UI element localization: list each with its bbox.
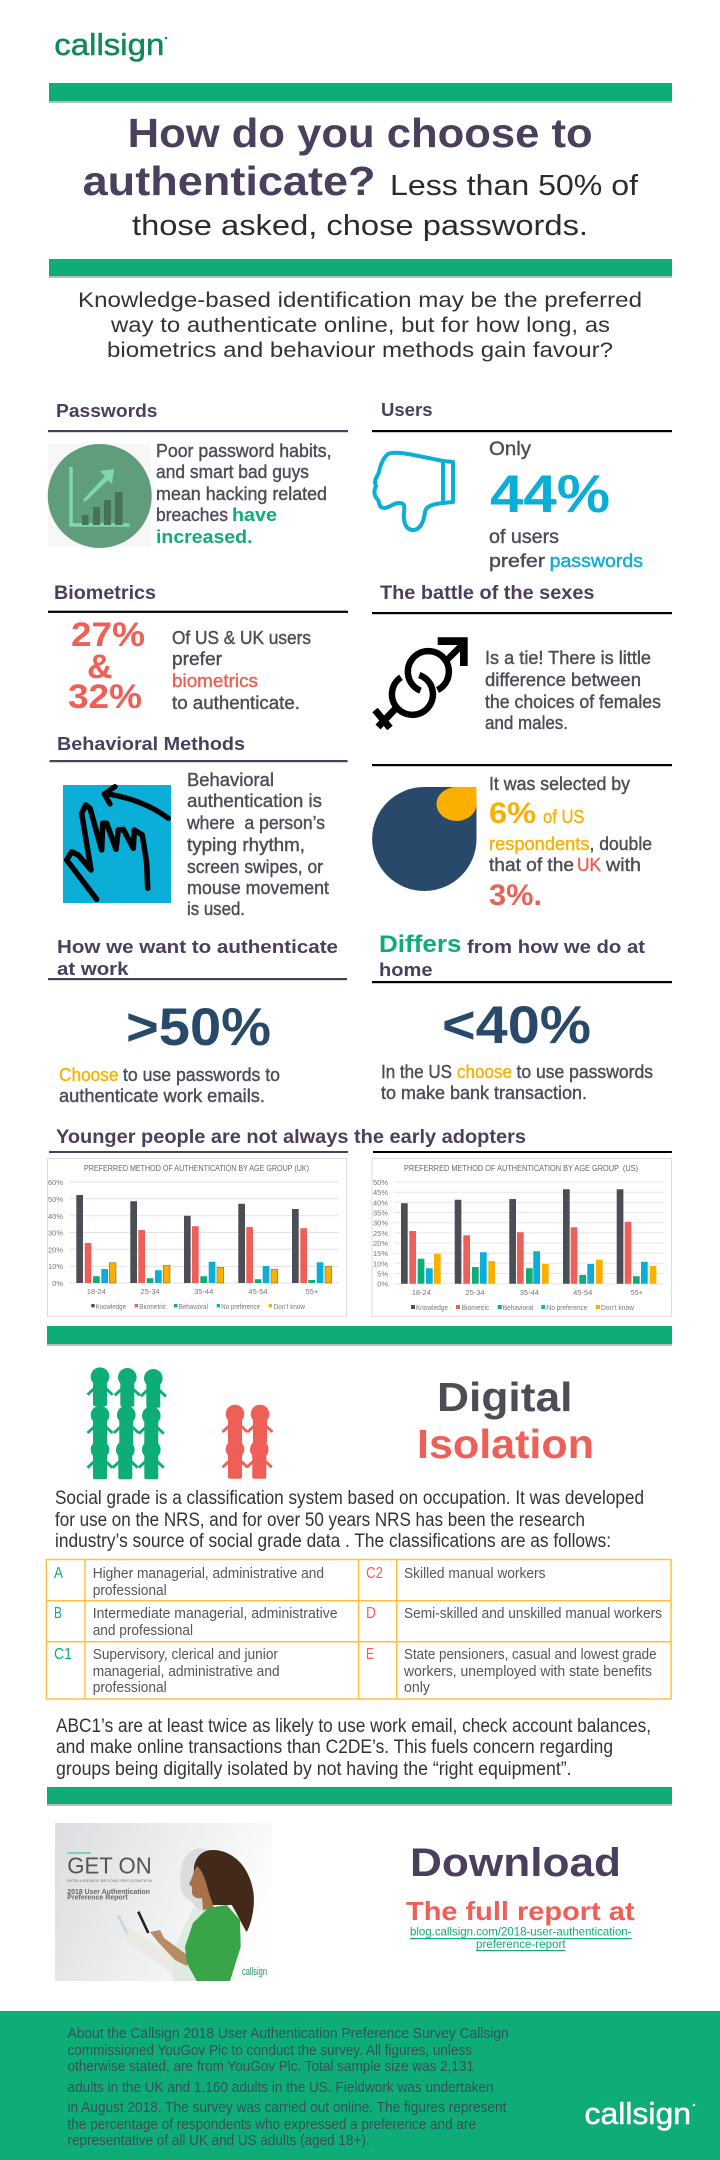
table: social grades: Higher managerial, administrative and bbox=[93, 1566, 324, 1582]
pie chart bbox=[372, 787, 476, 891]
link: report url: blog.callsign.com/2018-user-authentication- bbox=[410, 1925, 632, 1939]
chart legend bbox=[411, 1303, 635, 1312]
text block: password habits: increased. bbox=[156, 527, 252, 547]
bar chart: UK bbox=[48, 1158, 346, 1316]
chart legend: Don’t know bbox=[601, 1303, 635, 1312]
report cover image: Preference Report bbox=[67, 1894, 128, 1901]
bar chart: US: 55+ bbox=[630, 1288, 644, 1297]
table: social grades: professional bbox=[93, 1583, 167, 1599]
footer panel bbox=[0, 2011, 720, 2160]
bar chart: US: 18-24 bbox=[412, 1288, 431, 1297]
table: social grades: C2 bbox=[366, 1565, 383, 1582]
bar chart: US: 35% bbox=[373, 1208, 388, 1218]
text block: about the survey: adults in the UK and 1,160 adults in the US. Fieldwork was undertaken bbox=[68, 2079, 494, 2096]
panel: behavioral methods bbox=[50, 734, 348, 919]
text block: social grade: Social grade is a classification system based on occupation. It was developed bbox=[55, 1488, 644, 1509]
table: social grades: E bbox=[366, 1646, 374, 1663]
text block: selected by: respondents bbox=[489, 834, 590, 854]
panel: work authentication bbox=[48, 937, 347, 1106]
text block: selected by: with bbox=[605, 855, 641, 875]
heading: battle of the sexes: The battle of the sexes bbox=[380, 583, 594, 604]
table: social grades: Supervisory, clerical and junior bbox=[93, 1647, 278, 1663]
report cover image: GET ON bbox=[67, 1852, 152, 1878]
text block: password habits: have bbox=[232, 505, 277, 525]
icon: green people group bbox=[88, 1367, 166, 1479]
bar chart: US: 50% bbox=[373, 1178, 388, 1187]
heading: at work: at work bbox=[57, 959, 130, 979]
text block: bank transaction: choose bbox=[457, 1062, 512, 1082]
text block: about the survey: in August 2018. The survey was carried out online. The figures represent bbox=[68, 2099, 507, 2116]
text block: about the survey: otherwise stated, are from YouGov Plc. Total sample size was 2,131 bbox=[68, 2058, 474, 2075]
bar chart: US: PREFERRED METHOD OF AUTHENTICATION BY AGE GROUP (US) bbox=[404, 1164, 638, 1173]
text block: about the survey: representative of all UK and US adults (aged 18+). bbox=[68, 2132, 370, 2149]
panel: biometrics bbox=[48, 583, 348, 716]
text block: selected by: 3%. bbox=[489, 879, 542, 912]
table: social grades: and professional bbox=[93, 1623, 193, 1639]
title bbox=[83, 110, 639, 242]
panel: users bbox=[372, 400, 672, 571]
chart legend: Biometric bbox=[462, 1303, 490, 1312]
text block: behavioral authentication: is used. bbox=[187, 899, 245, 919]
icon: red people group bbox=[222, 1405, 272, 1479]
table: social grades: only bbox=[404, 1680, 431, 1696]
icon: thumbs down bbox=[374, 453, 453, 530]
text block: biometrics: prefer bbox=[172, 649, 222, 669]
text block: selected by bbox=[489, 774, 652, 912]
table: social grades bbox=[46, 1560, 671, 1699]
text block: work emails bbox=[59, 1065, 280, 1106]
table: social grades: A bbox=[54, 1565, 64, 1582]
bar chart: UK: 30% bbox=[48, 1228, 63, 1238]
bar chart: US: 5% bbox=[377, 1270, 388, 1278]
text block: biometrics: biometrics bbox=[172, 671, 258, 691]
bar chart: US: 0% bbox=[377, 1280, 388, 1289]
chart legend: Knowledge bbox=[96, 1302, 126, 1311]
report cover image: INTELLIGENCE BEYOND RECOGNITION bbox=[67, 1879, 152, 1883]
text block: work emails: Choose bbox=[59, 1065, 118, 1085]
text block: work emails: to use passwords to bbox=[123, 1065, 280, 1085]
icon: rising chart in circle bbox=[48, 444, 152, 548]
table: social grades: Skilled manual workers bbox=[404, 1566, 546, 1582]
heading: digital isolation: Isolation bbox=[417, 1421, 594, 1467]
section bar: digital isolation top bbox=[47, 1326, 672, 1346]
text block: selected by: that of the bbox=[489, 855, 574, 875]
text block: 44 percent: passwords bbox=[550, 551, 643, 571]
text block: selected by: of US bbox=[543, 807, 584, 827]
heading: at work bbox=[57, 937, 338, 979]
text block: about the survey: commissioned YouGov Plc to conduct the survey. All figures, unless bbox=[68, 2042, 472, 2059]
table: social grades: B bbox=[54, 1605, 62, 1622]
stats: 27 and 32 percent: 27% bbox=[71, 616, 145, 654]
heading: the full report at: The full report at bbox=[406, 1896, 635, 1926]
text block: about the survey bbox=[68, 2025, 509, 2149]
text block: biometrics bbox=[172, 628, 311, 713]
bar chart: UK: 40% bbox=[48, 1212, 63, 1221]
text block: 44 percent: prefer bbox=[489, 551, 545, 571]
panel: home authentication bbox=[372, 931, 672, 1103]
text block: selected by: It was selected by bbox=[489, 774, 630, 794]
bar chart: US: 45% bbox=[373, 1188, 388, 1197]
bar chart: US: 30% bbox=[373, 1219, 388, 1228]
text block: behavioral authentication: Behavioral bbox=[187, 770, 274, 790]
text block: behavioral authentication: authentication is bbox=[187, 791, 322, 811]
text block: behavioral authentication bbox=[186, 770, 329, 919]
chart legend: No preference bbox=[221, 1302, 260, 1311]
link: report url: preference-report bbox=[476, 1937, 566, 1951]
panel: passwords bbox=[48, 401, 348, 548]
table: social grades: D bbox=[366, 1605, 376, 1622]
link: report url bbox=[410, 1925, 632, 1951]
icon: swiping hand bbox=[63, 785, 171, 903]
text block: biometrics: to authenticate. bbox=[172, 693, 300, 713]
intro text: way to authenticate online, but for how long, as bbox=[110, 314, 610, 337]
chart legend: Don’t know bbox=[274, 1302, 305, 1311]
bar chart: UK: 18-24 bbox=[87, 1287, 106, 1296]
bar chart: US: 45-54 bbox=[573, 1288, 592, 1297]
text block: ABC1: and make online transactions than C2DE’s. This fuels concern regarding bbox=[56, 1737, 613, 1758]
text block: password habits: and smart bad guys bbox=[156, 462, 309, 482]
title: authenticate? bbox=[83, 158, 376, 204]
bar chart: UK: 55+ bbox=[306, 1287, 319, 1296]
report cover image bbox=[55, 1823, 272, 1981]
bar chart: US: 15% bbox=[373, 1249, 388, 1258]
heading: differs at home: from how we do at bbox=[467, 937, 645, 957]
bar chart: UK: PREFERRED METHOD OF AUTHENTICATION BY AGE GROUP (UK) bbox=[84, 1164, 309, 1173]
text block: password habits: breaches bbox=[156, 505, 228, 525]
text block: behavioral authentication: screen swipes, or bbox=[187, 857, 323, 877]
section bar: download top bbox=[47, 1787, 672, 1806]
heading: differs at home: home bbox=[379, 960, 432, 980]
chart legend: Behavioral bbox=[503, 1303, 534, 1312]
text block: about the survey: the percentage of respondents who expressed a preference and are bbox=[68, 2116, 476, 2133]
title: How do you choose to bbox=[128, 110, 593, 156]
stat: under 40 percent: <40% bbox=[442, 996, 591, 1055]
text block: ABC1: ABC1’s are at least twice as likely to use work email, check account balances, bbox=[56, 1716, 651, 1737]
bar chart: US: 20% bbox=[373, 1239, 388, 1248]
stats: 27 and 32 percent: 32% bbox=[68, 678, 142, 716]
table: social grades: C1 bbox=[54, 1646, 72, 1663]
text block: 44 percent: Only bbox=[489, 439, 532, 460]
heading: download: Download bbox=[410, 1841, 621, 1885]
table: social grades: professional bbox=[93, 1680, 167, 1696]
text block: password habits: mean hacking related bbox=[156, 484, 327, 504]
bar chart: US: 40% bbox=[373, 1198, 388, 1207]
stat: over 50 percent: >50% bbox=[126, 998, 271, 1057]
bar chart: UK: 10% bbox=[48, 1262, 63, 1271]
chart legend: Behavioral bbox=[179, 1302, 208, 1311]
text block: behavioral authentication: where a person’s bbox=[186, 813, 325, 833]
chart legend: Knowledge bbox=[416, 1303, 448, 1312]
bar chart: US: 25% bbox=[373, 1229, 388, 1238]
bar chart: US: 10% bbox=[373, 1259, 388, 1268]
heading: at work: How we want to authenticate bbox=[57, 937, 338, 957]
text block: bank transaction: to make bank transaction. bbox=[381, 1083, 587, 1103]
chart legend: Biometric bbox=[139, 1302, 166, 1311]
text block: ABC1 bbox=[56, 1716, 651, 1780]
table: social grades: State pensioners, casual and lowest grade bbox=[404, 1647, 657, 1663]
text block: a tie: the choices of females bbox=[485, 692, 661, 712]
text block: password habits: Poor password habits, bbox=[156, 441, 332, 461]
stats: 27 and 32 percent: & bbox=[87, 648, 112, 686]
heading: digital isolation: Digital bbox=[437, 1374, 572, 1420]
logo: callsign white: callsign bbox=[584, 2096, 691, 2131]
text block: ABC1: groups being digitally isolated by not having the “right equipment”. bbox=[56, 1759, 572, 1780]
text block: behavioral authentication: typing rhythm, bbox=[187, 835, 305, 855]
heading: digital isolation bbox=[417, 1374, 594, 1467]
text block: bank transaction bbox=[381, 1062, 653, 1103]
text block: social grade: for use on the NRS, and for over 50 years NRS has been the research bbox=[55, 1510, 585, 1531]
bar chart: UK: 20% bbox=[48, 1245, 63, 1254]
text block: selected by: UK bbox=[577, 855, 601, 875]
chart legend: No preference bbox=[547, 1303, 587, 1312]
heading: differs at home: Differs bbox=[379, 931, 462, 958]
intro text: Knowledge-based identification may be the preferred bbox=[78, 289, 642, 312]
bar chart: UK: 0% bbox=[52, 1279, 63, 1288]
heading: passwords: Passwords bbox=[56, 401, 158, 421]
table: social grades: workers, unemployed with state benefits bbox=[403, 1664, 652, 1680]
bar chart: UK: 35-44 bbox=[194, 1287, 213, 1296]
text block: work emails: authenticate work emails. bbox=[59, 1086, 265, 1106]
text block: a tie: and males. bbox=[485, 713, 568, 733]
text block: selected by: 6% bbox=[489, 797, 536, 830]
text block: selected by: , double bbox=[590, 834, 652, 854]
bar chart: US: 35-44 bbox=[520, 1288, 539, 1297]
title: those asked, chose passwords. bbox=[132, 210, 588, 242]
bar chart: UK: 50% bbox=[48, 1195, 63, 1204]
icon: interlocked gender symbols bbox=[375, 637, 468, 728]
bar chart: UK: 25-34 bbox=[140, 1287, 160, 1296]
chart legend bbox=[91, 1302, 305, 1311]
panel: six percent bbox=[372, 764, 672, 912]
header bar top bbox=[49, 83, 672, 103]
report cover image: 2018 User Authentication bbox=[67, 1889, 150, 1896]
header bar bottom bbox=[49, 259, 672, 278]
text block: 44 percent: of users bbox=[489, 527, 559, 548]
text block: bank transaction: to use passwords bbox=[516, 1062, 653, 1082]
report cover image: callsign bbox=[242, 1966, 267, 1978]
text block: about the survey: About the Callsign 2018 User Authentication Preference Survey Callsign bbox=[68, 2025, 509, 2042]
table: social grades: managerial, administrative and bbox=[93, 1664, 280, 1680]
heading: younger people: Younger people are not always the early adopters bbox=[56, 1127, 526, 1148]
heading: users: Users bbox=[381, 400, 432, 420]
title: Less than 50% of bbox=[390, 170, 639, 202]
text block: 44 percent: 44% bbox=[490, 465, 610, 524]
text block: 44 percent bbox=[489, 439, 643, 571]
bar chart: US bbox=[372, 1158, 672, 1316]
intro text: biometrics and behaviour methods gain favour? bbox=[107, 339, 613, 362]
table: social grades: Intermediate managerial, administrative bbox=[93, 1606, 338, 1622]
text block: biometrics: Of US & UK users bbox=[172, 628, 311, 648]
logo: callsign: callsign bbox=[54, 27, 164, 62]
heading: behavioral methods: Behavioral Methods bbox=[57, 734, 245, 754]
bar chart: UK: 45-54 bbox=[248, 1287, 268, 1296]
stats: 27 and 32 percent bbox=[68, 616, 145, 716]
heading: biometrics: Biometrics bbox=[54, 583, 156, 604]
text block: a tie bbox=[485, 648, 661, 733]
text block: password habits bbox=[156, 441, 332, 547]
text block: a tie: Is a tie! There is little bbox=[485, 648, 651, 668]
intro text bbox=[78, 289, 642, 362]
heading: differs at home bbox=[379, 931, 645, 980]
text block: a tie: difference between bbox=[485, 670, 641, 690]
panel: battle of the sexes bbox=[372, 583, 672, 733]
table: social grades: Semi-skilled and unskilled manual workers bbox=[404, 1606, 662, 1622]
text block: social grade bbox=[55, 1488, 644, 1552]
text block: bank transaction: In the US bbox=[381, 1062, 452, 1082]
text block: behavioral authentication: mouse movement bbox=[187, 878, 329, 898]
bar chart: US: 25-34 bbox=[465, 1288, 485, 1297]
text block: social grade: industry’s source of social grade data . The classifications are as follows: bbox=[55, 1531, 611, 1552]
bar chart: UK: 60% bbox=[48, 1178, 63, 1187]
